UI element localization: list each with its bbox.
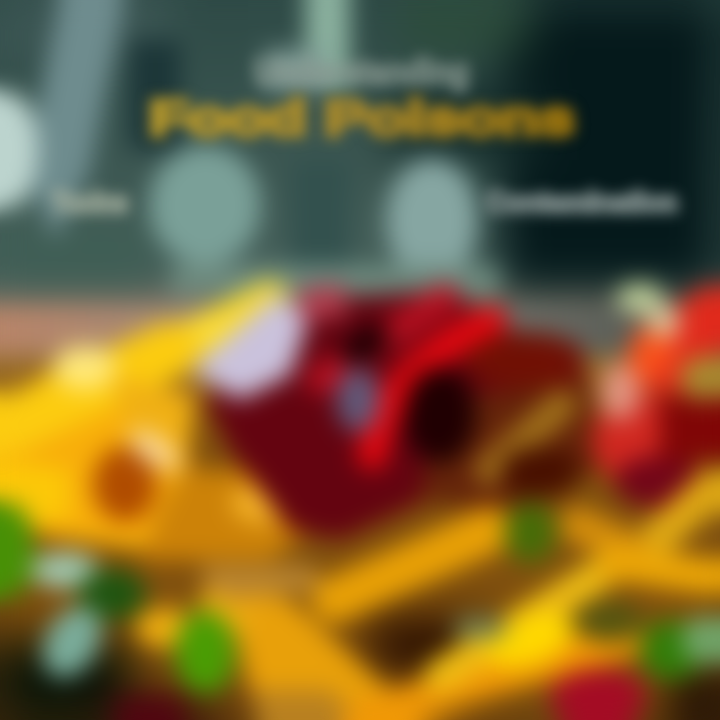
label: right caption: Contamination — [486, 186, 678, 219]
food photo: green herbs — [0, 502, 720, 694]
label: left caption: Toxins — [52, 186, 128, 219]
heading: main title: Food Poisons — [149, 90, 575, 146]
food photo: yellow fries lower right — [200, 480, 720, 715]
food photo: red meat — [205, 290, 600, 540]
food photo: red pepper right — [592, 282, 720, 508]
heading group — [52, 51, 678, 219]
food photo: yellow fries and orange pieces left — [0, 300, 390, 720]
food photo: tabletop band — [0, 305, 720, 355]
food photo: red accents at bottom edge — [110, 668, 646, 720]
heading: small overline: Understanding — [255, 51, 469, 92]
food photo: dark plate base — [0, 400, 720, 720]
food photo: meat highlights — [190, 295, 585, 498]
